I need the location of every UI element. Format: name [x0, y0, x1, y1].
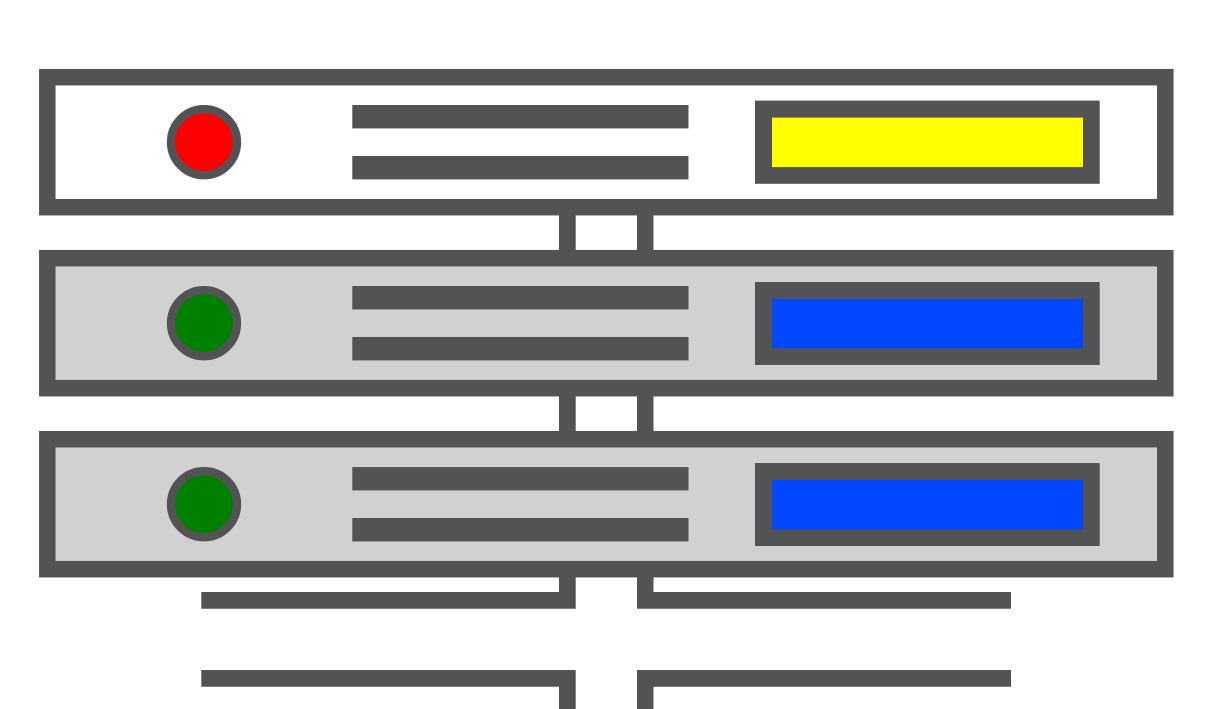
lower bus lines leaving the page: [201, 670, 1011, 709]
icon: green status light: [171, 471, 237, 537]
blue slot: [755, 282, 1100, 365]
icon: red status light: [171, 109, 237, 175]
panel: unit 3 (gray, green status, blue slot): [47, 439, 1165, 569]
icon: green status light: [171, 290, 237, 356]
connectors between unit 1 and unit 2: [559, 210, 654, 255]
panel: unit 2 (gray, green status, blue slot): [47, 258, 1165, 388]
upper bus lines leaving unit 3: [201, 577, 1011, 609]
yellow slot: [755, 101, 1100, 184]
panel: unit 1 (white, red status, yellow slot): [47, 77, 1165, 207]
connectors between unit 2 and unit 3: [559, 391, 654, 436]
text line placeholders: [352, 105, 688, 179]
text line placeholders: [352, 467, 688, 541]
text line placeholders: [352, 286, 688, 360]
blue slot: [755, 463, 1100, 546]
